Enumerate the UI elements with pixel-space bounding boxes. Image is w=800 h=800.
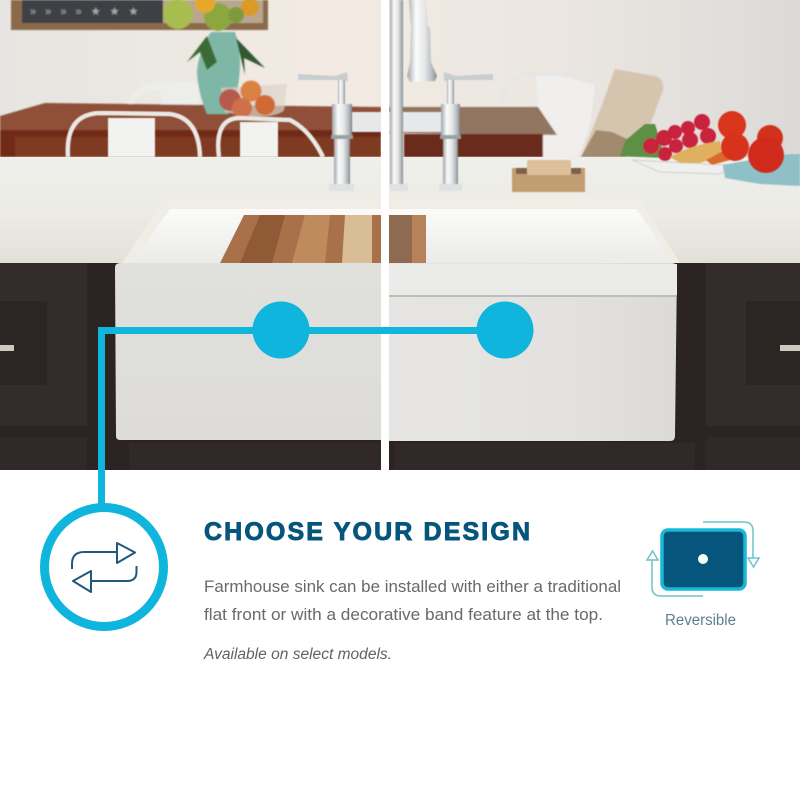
- faucet spout: [390, 0, 437, 191]
- body text: [204, 578, 621, 624]
- dining chair behind table, left: [128, 82, 199, 106]
- vase with flowers: [163, 0, 265, 114]
- photo: farmhouse sink in kitchen: [0, 0, 800, 470]
- icon: reversible sink: [647, 522, 759, 596]
- sink basin rim: [122, 194, 680, 263]
- dining table, left: [0, 103, 381, 157]
- framed chalkboard: [11, 0, 268, 30]
- white metal chairs, foreground: [68, 113, 323, 157]
- wooden cutting board: [220, 215, 426, 263]
- upholstered chair: [581, 69, 663, 157]
- white split divider: [381, 0, 389, 470]
- left drawer panel: [0, 263, 87, 426]
- faucet handle, left: [298, 72, 354, 191]
- plate of vegetables: [620, 111, 783, 174]
- soap dish: [512, 160, 585, 192]
- tomato: [748, 137, 784, 173]
- right drawer panel: [706, 263, 800, 426]
- icon: swap arrows: [72, 543, 136, 592]
- cabinets: [0, 263, 800, 470]
- heading: CHOOSE YOUR DESIGN: [204, 518, 530, 546]
- sink apron, flat front: [115, 263, 381, 440]
- dining table, right: [389, 107, 557, 157]
- framed chalkboard: » » » » ★ ★ ★: [30, 6, 141, 18]
- background furniture and decor: [0, 0, 663, 157]
- marker dot: flat front: [252, 302, 310, 358]
- kitchen wall: [0, 0, 800, 160]
- sink apron, decorative band front: [389, 263, 677, 441]
- fruit bowl: [219, 80, 287, 118]
- countertop: [0, 157, 800, 263]
- availability note: Available on select models.: [203, 646, 392, 663]
- blue towel: [723, 154, 800, 186]
- faucet handle, right: [439, 72, 493, 191]
- sink basin inside: [132, 209, 672, 263]
- body text: Farmhouse sink can be installed with either a traditional: [204, 578, 621, 596]
- body text: flat front or with a decorative band feature at the top.: [204, 606, 603, 624]
- icon label: Reversible: [665, 612, 736, 629]
- faucet bridge: [352, 112, 444, 132]
- icon ring with swap arrows: [44, 508, 164, 626]
- connector line: [102, 330, 505, 510]
- marker dot: band front: [476, 302, 534, 358]
- white chair, right: [503, 74, 600, 157]
